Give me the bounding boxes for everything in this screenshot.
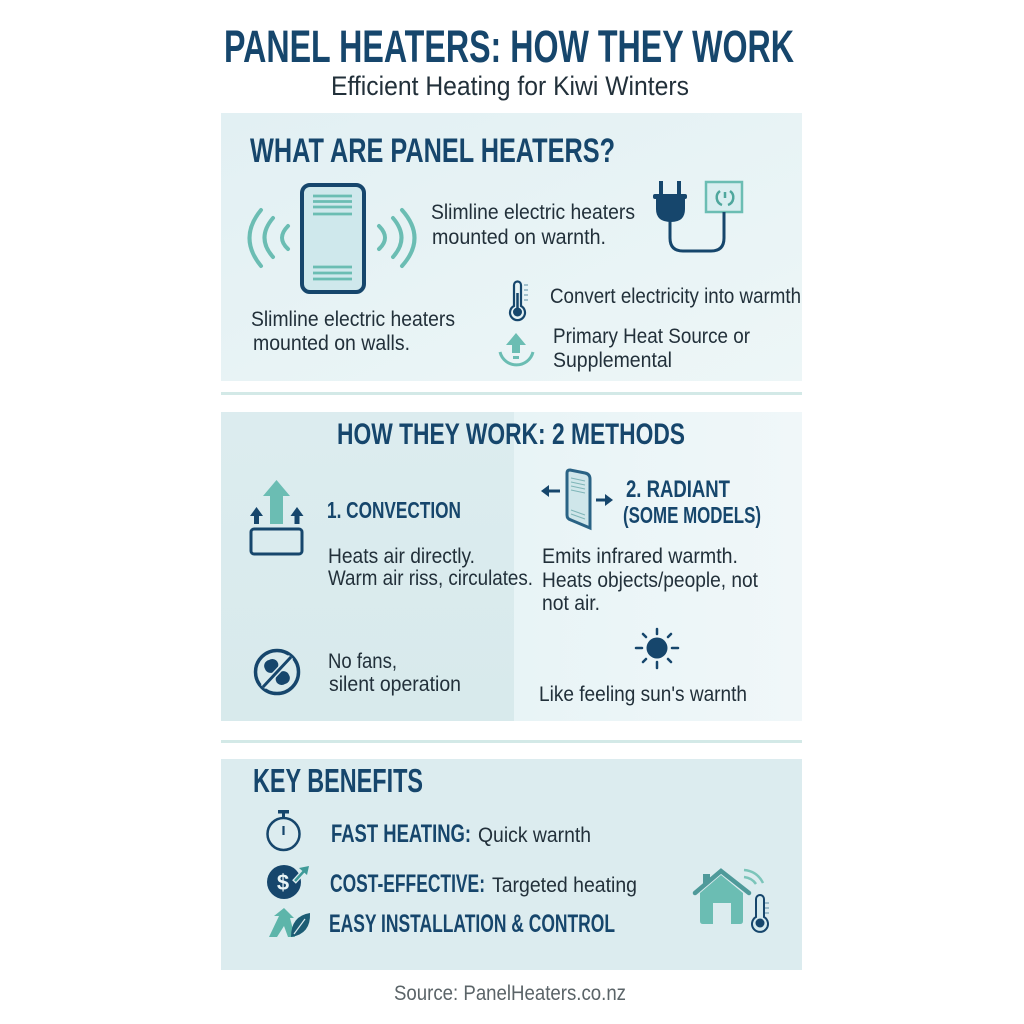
text: convection description: Warm air riss, circulates.	[328, 567, 533, 590]
text: mounted on walls	[251, 308, 455, 355]
text: mounted on walls: Slimline electric heaters	[251, 308, 455, 331]
icon: upward arrow in arc	[500, 333, 533, 365]
text: easy installation: EASY INSTALLATION & CONTROL	[329, 910, 615, 938]
icon: convection arrows	[250, 480, 304, 554]
subtitle: Efficient Heating for Kiwi Winters	[331, 71, 689, 101]
icon: smart house with thermometer	[695, 870, 769, 932]
icon: dollar coin with arrow: $	[277, 870, 289, 895]
text: primary heat source: Supplemental	[553, 349, 672, 372]
text: mounted on walls: mounted on walls.	[253, 332, 410, 355]
heading: radiant: (SOME MODELS)	[623, 502, 761, 528]
heading: radiant	[623, 476, 761, 528]
text: mounted on warmth: mounted on warnth.	[432, 226, 606, 249]
text: convection description	[328, 545, 533, 590]
text: radiant description: Emits infrared warmth.	[542, 545, 738, 568]
text: no fans: silent operation	[329, 673, 461, 696]
panel: how they work	[221, 412, 802, 721]
icon: plug and socket	[653, 181, 742, 251]
heading: key benefits: KEY BENEFITS	[253, 762, 423, 799]
heading: how they work: HOW THEY WORK: 2 METHODS	[337, 418, 685, 451]
icon: stopwatch	[268, 810, 300, 850]
text: radiant description: Heats objects/people, not	[542, 569, 758, 592]
text: fast heating: FAST HEATING:	[331, 820, 471, 848]
text: radiant description	[542, 545, 758, 615]
icon: panel heater with heat waves	[250, 185, 414, 292]
text: mounted on warmth: Slimline electric heaters	[431, 201, 635, 224]
text: convection description: Heats air directly.	[328, 545, 475, 568]
icon: sun	[636, 629, 678, 668]
text: primary heat source	[553, 325, 750, 372]
heading: convection: 1. CONVECTION	[327, 497, 461, 523]
text: primary heat source: Primary Heat Source or	[553, 325, 750, 348]
icon: thermometer	[510, 282, 528, 320]
icon: radiant panel with arrows	[541, 470, 613, 528]
heading: radiant: 2. RADIANT	[626, 476, 730, 503]
icon: dollar coin with arrow	[267, 865, 309, 899]
text: like feeling sun's warmth: Like feeling sun's warnth	[539, 683, 747, 706]
text: convert electricity: Convert electricity into warmth	[550, 285, 801, 308]
source line: Source: PanelHeaters.co.nz	[394, 982, 626, 1005]
panel: key benefits	[221, 759, 802, 970]
title: PANEL HEATERS: HOW THEY WORK	[224, 21, 794, 72]
icon: arrow and leaf	[269, 908, 310, 937]
text: mounted on warmth	[431, 201, 635, 249]
text: cost-effective: Targeted heating	[492, 874, 637, 897]
text: fast heating: Quick warnth	[478, 824, 591, 847]
icon: no fans	[256, 650, 298, 694]
panel: what are panel heaters	[221, 113, 802, 381]
heading: what are panel heaters: WHAT ARE PANEL HEATERS?	[250, 132, 615, 170]
text: no fans	[328, 650, 461, 696]
text: cost-effective: COST-EFFECTIVE:	[330, 870, 485, 898]
text: no fans: No fans,	[328, 650, 397, 673]
text: radiant description: not air.	[542, 592, 600, 615]
